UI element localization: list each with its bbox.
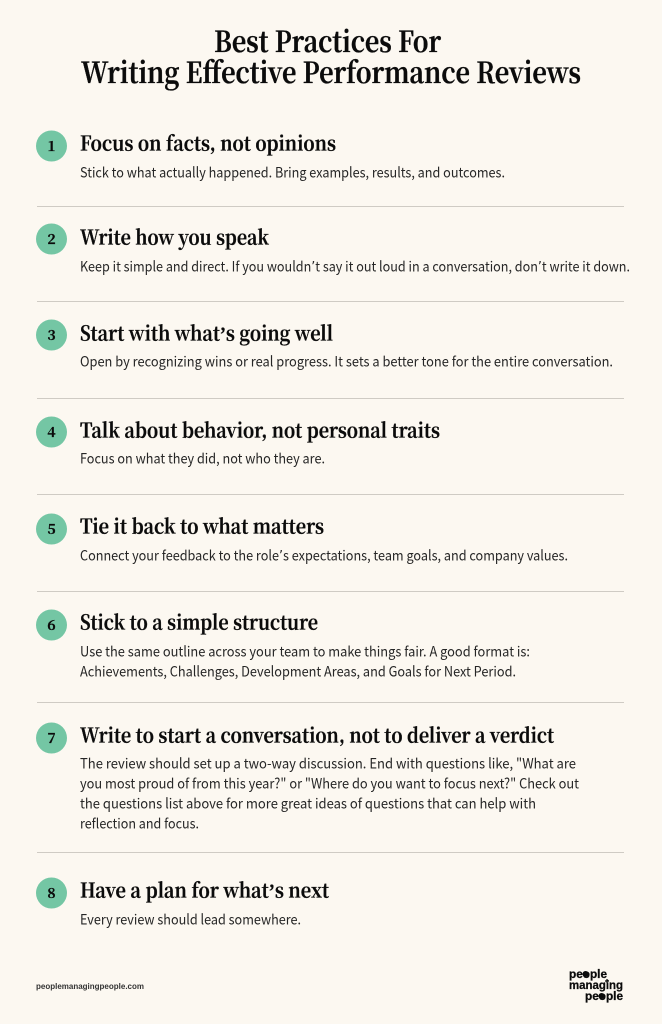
heading 6: Stick to a simple structure <box>80 607 318 636</box>
badge 5 <box>36 514 67 544</box>
body 7: you most proud of from this year?" or "Where do you want to focus next?" Check out <box>80 774 580 794</box>
badge 6: 6 <box>47 615 56 635</box>
heading 1: Focus on facts, not opinions <box>80 128 336 157</box>
body 3: Open by recognizing wins or real progress. It sets a better tone for the entire conversation. <box>80 352 613 372</box>
item 8 <box>36 875 329 930</box>
body 4: Focus on what they did, not who they are. <box>80 449 325 469</box>
badge 4 <box>36 416 67 448</box>
heading 3: Start with what’s going well <box>80 318 333 347</box>
heading 7: Write to start a conversation, not to deliver a verdict <box>80 720 554 749</box>
badge 7: 7 <box>47 728 56 748</box>
footer url: peoplemanagingpeople.com <box>36 982 144 991</box>
badge 1: 1 <box>47 136 56 156</box>
badge 7 <box>36 722 67 754</box>
body 1: Stick to what actually happened. Bring examples, results, and outcomes. <box>80 163 505 183</box>
body 6: Achievements, Challenges, Development Areas, and Goals for Next Period. <box>80 662 516 682</box>
body 2: Keep it simple and direct. If you wouldn’t say it out loud in a conversation, don’t write it down. <box>80 257 630 277</box>
body 7: the questions list above for more great ideas of questions that can help with <box>80 794 536 814</box>
logo: managing <box>569 980 623 992</box>
badge 2 <box>36 224 67 254</box>
item 6 <box>36 607 530 682</box>
badge 5: 5 <box>47 519 56 539</box>
body 7 <box>80 754 580 834</box>
heading 5: Tie it back to what matters <box>80 511 324 540</box>
title: Best Practices For <box>214 20 441 61</box>
heading 8: Have a plan for what’s next <box>80 875 329 904</box>
logo: people <box>585 991 623 1003</box>
badge 1 <box>36 130 67 162</box>
item 5 <box>36 511 568 566</box>
badge 8: 8 <box>47 883 56 903</box>
logo <box>569 969 623 1003</box>
badge 6 <box>36 610 67 640</box>
heading 4: Talk about behavior, not personal traits <box>80 415 440 444</box>
body 7: The review should set up a two-way discussion. End with questions like, "What are <box>80 754 576 774</box>
title <box>81 20 581 92</box>
title: Writing Effective Performance Reviews <box>81 51 581 92</box>
item 4 <box>36 415 440 469</box>
heading 2: Write how you speak <box>80 222 269 251</box>
badge 2: 2 <box>47 229 56 249</box>
item 1 <box>36 128 505 183</box>
item 3 <box>36 318 613 372</box>
body 8: Every review should lead somewhere. <box>80 910 301 930</box>
body 6: Use the same outline across your team to make things fair. A good format is: <box>80 642 530 662</box>
body 5: Connect your feedback to the role’s expectations, team goals, and company values. <box>80 546 568 566</box>
body 6 <box>80 642 530 682</box>
badge 3 <box>36 320 67 350</box>
badge 8 <box>36 878 67 908</box>
item 2 <box>36 222 630 277</box>
body 7: reflection and focus. <box>80 814 199 834</box>
logo: people <box>569 969 607 981</box>
badge 3: 3 <box>47 325 56 345</box>
item 7 <box>36 720 580 834</box>
badge 4: 4 <box>47 422 56 442</box>
